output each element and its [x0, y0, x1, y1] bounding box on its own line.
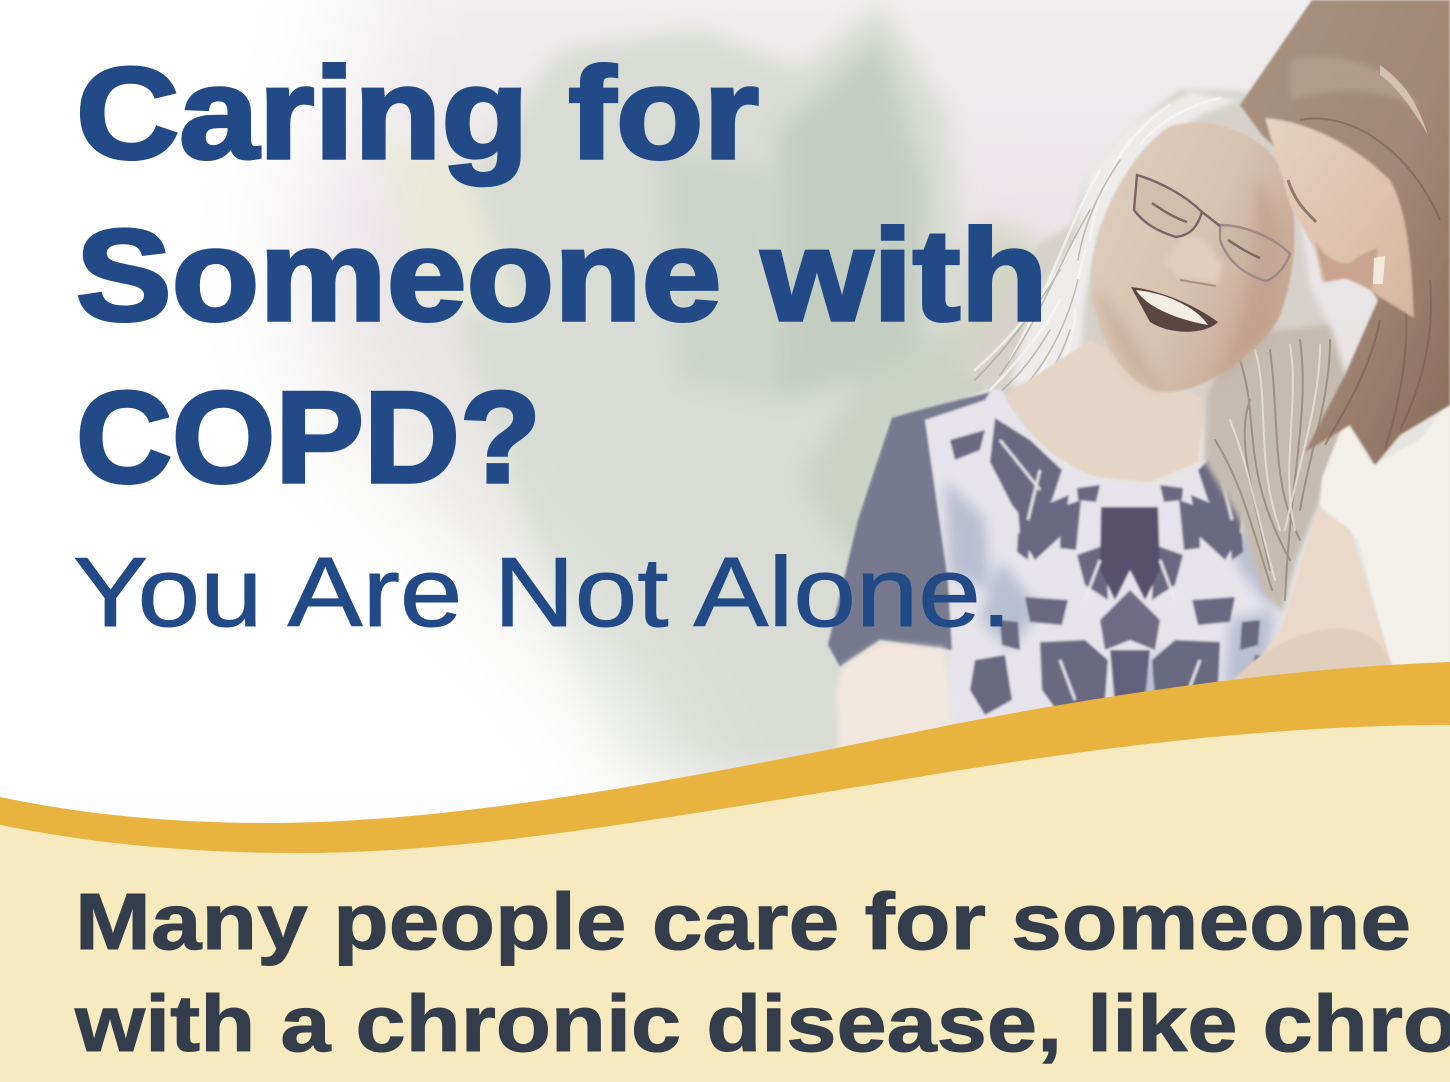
blurred trees	[375, 5, 1040, 760]
glasses	[1134, 175, 1290, 281]
title: Caring for	[76, 40, 759, 186]
younger woman arm and hand	[1225, 507, 1392, 690]
dress blots	[950, 418, 1310, 715]
dress light details	[1000, 440, 1260, 700]
title: COPD?	[76, 364, 541, 510]
body text: Many people care for someone	[75, 877, 1411, 966]
younger woman face	[1265, 118, 1414, 318]
body text	[74, 877, 1450, 1068]
elder woman arm	[836, 642, 952, 752]
sleeve	[828, 392, 990, 667]
elder woman hair, back	[965, 90, 1330, 410]
subtitle: You Are Not Alone.	[73, 537, 1012, 647]
title	[76, 40, 1048, 510]
elder woman neck	[1005, 340, 1205, 482]
blue-grey washes	[945, 480, 1290, 715]
younger woman shirt	[1320, 400, 1450, 670]
body text: with a chronic disease, like chro	[74, 979, 1450, 1068]
face shading	[1215, 180, 1281, 385]
elder woman dress	[828, 390, 1310, 745]
nose	[1163, 235, 1222, 284]
hand	[1225, 628, 1392, 690]
closed eyes	[1152, 203, 1260, 258]
smile	[1131, 287, 1218, 332]
patterned front	[912, 390, 1296, 745]
elder woman face	[1091, 123, 1294, 392]
elder woman hair, front right	[1205, 325, 1352, 612]
white fade on left	[0, 0, 720, 900]
gold wave	[0, 662, 1450, 853]
sky	[0, 0, 1450, 860]
title: Someone with	[76, 202, 1048, 348]
cream bottom band	[0, 725, 1450, 1082]
younger woman hair	[1240, 0, 1450, 465]
